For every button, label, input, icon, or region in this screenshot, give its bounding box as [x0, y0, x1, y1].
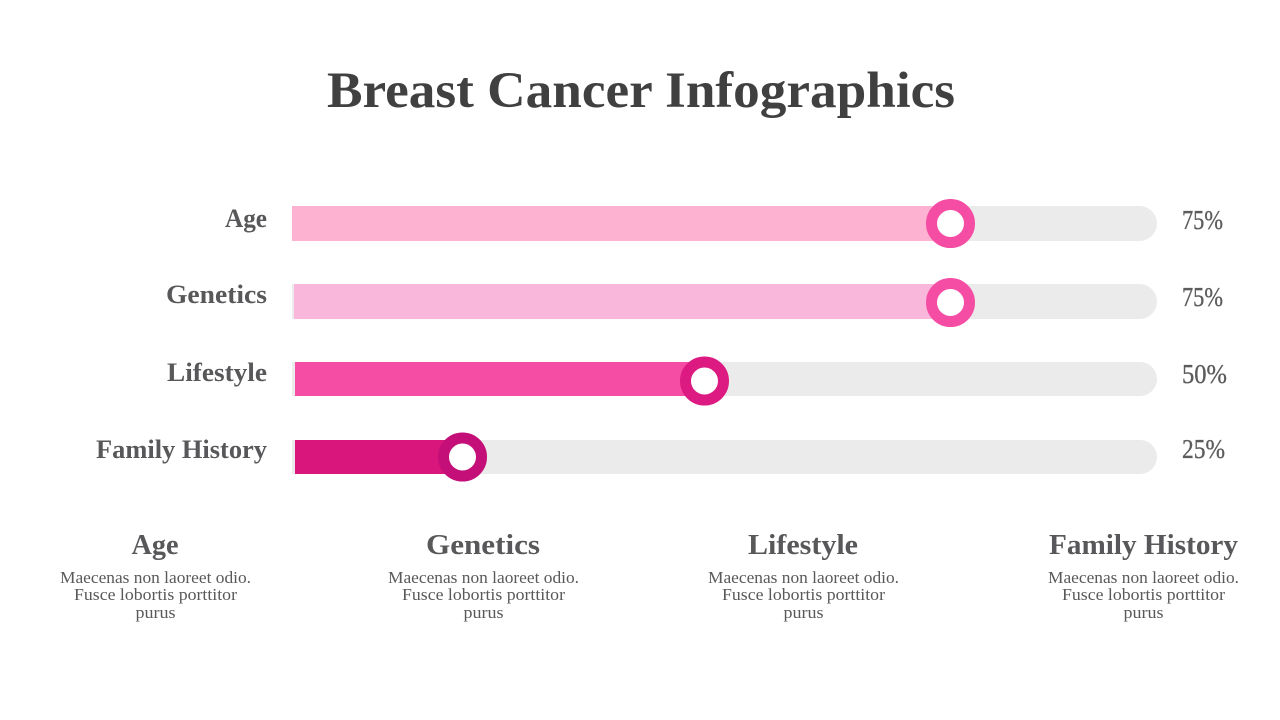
text block: Lifestyle: Lifestyle	[748, 529, 858, 561]
text block: Genetics: Fusce lobortis porttitor	[402, 585, 566, 604]
text block: Family History	[1048, 529, 1239, 622]
fill: Lifestyle 50%	[295, 362, 704, 396]
text block: Family History: purus	[1124, 603, 1164, 622]
text block: Age	[60, 529, 251, 622]
text block: Lifestyle: purus	[784, 603, 824, 622]
track: Lifestyle	[292, 362, 1157, 396]
label: Genetics: Genetics	[166, 280, 267, 309]
text block: Age: Fusce lobortis porttitor	[74, 585, 238, 604]
fill: Age 75%	[292, 206, 950, 241]
marker: Age	[932, 204, 970, 242]
label: Family History: Family History	[96, 435, 267, 464]
value: Lifestyle: 50%	[1182, 359, 1227, 389]
text block: Genetics: Genetics	[426, 529, 540, 561]
text block: Lifestyle	[708, 529, 899, 622]
value: Genetics: 75%	[1182, 282, 1223, 312]
text block: Family History: Fusce lobortis porttitor	[1062, 585, 1226, 604]
value: Family History: 25%	[1182, 434, 1225, 464]
text block: Genetics: Maecenas non laoreet odio.	[388, 568, 579, 587]
value: Age: 75%	[1182, 205, 1223, 235]
text block: Age: Age	[132, 529, 179, 561]
track: Age	[292, 206, 1157, 241]
title: Breast Cancer Infographics	[327, 63, 955, 119]
text block: Lifestyle: Maecenas non laoreet odio.	[708, 568, 899, 587]
text block: Lifestyle: Fusce lobortis porttitor	[722, 585, 886, 604]
text block: Family History: Maecenas non laoreet odio.	[1048, 568, 1239, 587]
text block: Genetics	[388, 529, 579, 622]
fill: Genetics 75%	[294, 284, 950, 319]
track: Family History	[292, 440, 1157, 474]
marker: Family History	[444, 438, 482, 476]
row: Age	[225, 204, 1223, 242]
text block: Genetics: purus	[464, 603, 504, 622]
label: Lifestyle: Lifestyle	[167, 358, 267, 387]
text block: Family History: Family History	[1049, 529, 1238, 561]
marker: Genetics	[932, 284, 970, 322]
row: Family History	[96, 434, 1225, 476]
bar chart	[96, 204, 1227, 476]
text block: Age: purus	[136, 603, 176, 622]
row: Genetics	[166, 280, 1223, 322]
track: Genetics	[292, 284, 1157, 319]
text block: Age: Maecenas non laoreet odio.	[60, 568, 251, 587]
marker: Lifestyle	[686, 362, 724, 400]
row: Lifestyle	[167, 358, 1227, 400]
fill: Family History 25%	[295, 440, 462, 474]
label: Age: Age	[225, 204, 267, 233]
